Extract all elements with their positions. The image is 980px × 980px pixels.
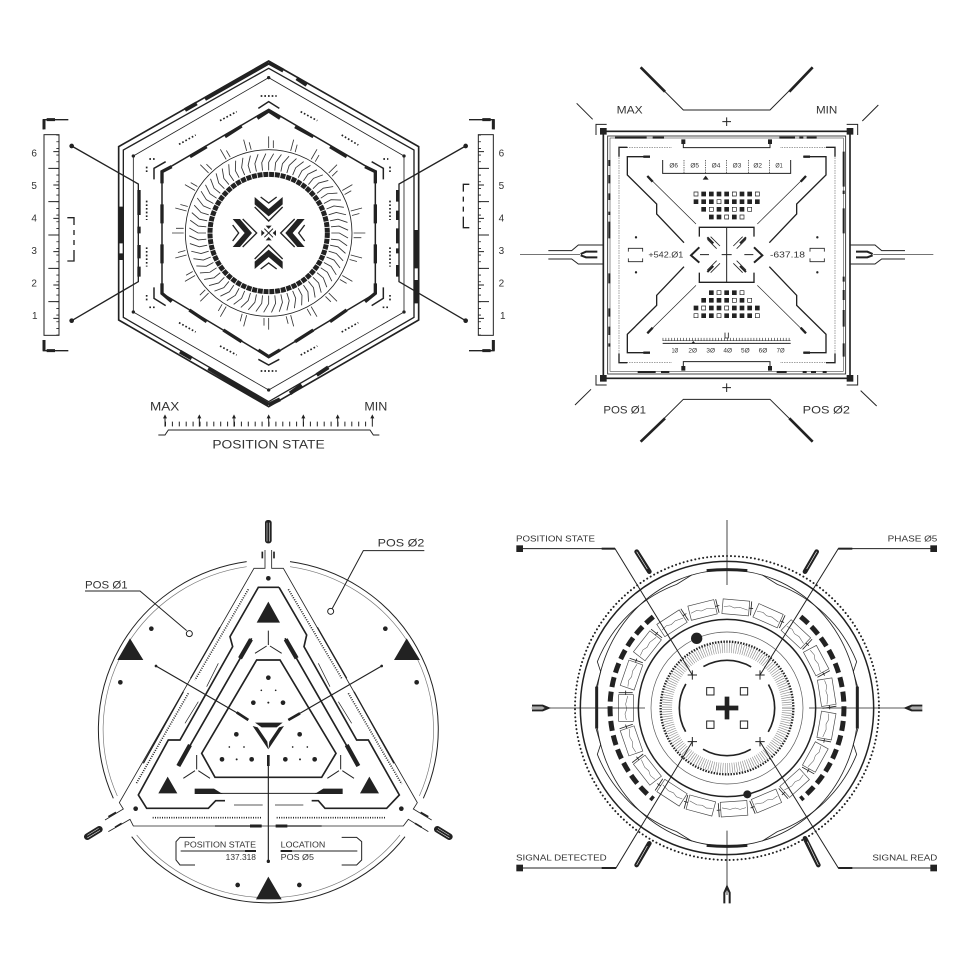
bottom scale: 7Ø (777, 348, 785, 354)
middle contour (138, 587, 399, 808)
diagonal circuit lines (627, 157, 826, 353)
ruler labels left: 4 (31, 214, 37, 225)
corner labels: POS Ø1 (603, 404, 646, 416)
panel: square scope (520, 67, 933, 442)
centre reticle (691, 227, 762, 282)
info box: POS Ø5 (281, 853, 315, 862)
callout: POS 01 (85, 579, 192, 637)
bottom scale: 1Ø (672, 348, 679, 354)
ruler labels left: 3 (31, 246, 37, 257)
bottom scale: 4Ø (723, 348, 732, 354)
small range brackets (67, 184, 469, 261)
ruler labels right: 6 (499, 149, 505, 160)
bottom scale: 6Ø (759, 348, 768, 354)
ruler labels left: 2 (31, 279, 37, 290)
callout: SIGNAL READ (760, 742, 938, 871)
bottom scale: 5Ø (741, 348, 750, 354)
panel: circular scope (516, 520, 938, 903)
square frame (596, 124, 858, 385)
right ruler and bracket (399, 120, 494, 351)
ruler labels right: 5 (499, 181, 505, 192)
centre Y emblem and radial lines (155, 665, 383, 863)
panel: triangle scope (85, 520, 449, 903)
callout: POS 01: POS Ø1 (85, 579, 128, 591)
readout brackets and dots (628, 236, 824, 273)
stem heads (87, 520, 449, 838)
inner dotted frame (619, 139, 835, 371)
callout: POS 02 (328, 538, 424, 614)
number table: Ø3 (733, 163, 742, 169)
corner labels: MIN (816, 104, 837, 116)
diagonal stem heads (637, 552, 818, 865)
corner labels: MAX (617, 104, 643, 116)
icon: centre chevrons (233, 197, 305, 269)
number table: Ø6 (669, 163, 679, 169)
panel: hexagon scope (31, 61, 506, 452)
number table (663, 160, 791, 180)
dotted side rails (136, 589, 402, 784)
bottom scale: 2Ø (688, 348, 697, 354)
corner labels: POS Ø2 (803, 404, 850, 416)
number table: Ø2 (753, 163, 763, 169)
callout: PHASE 05 (760, 534, 938, 675)
outer hexagon frame (119, 61, 419, 407)
inner triangle (202, 660, 336, 777)
inner rings and ticks (638, 619, 816, 797)
dot clusters (118, 626, 419, 887)
radial dial (172, 136, 365, 330)
ruler labels right: 1 (500, 311, 506, 322)
dotted accents (147, 96, 390, 371)
ring position dots (691, 633, 751, 798)
ruler labels right: 4 (499, 214, 505, 225)
ruler labels left: 1 (32, 311, 38, 322)
callout: PHASE 05: PHASE Ø5 (888, 534, 938, 543)
position state scale: POSITION STATE (212, 438, 325, 452)
module ring (619, 599, 837, 817)
readout values: +542.Ø1 (648, 250, 684, 260)
number table: Ø4 (712, 163, 721, 169)
crosshair axes (532, 520, 922, 903)
bottom scale: 3Ø (706, 348, 715, 354)
circle arcs (98, 562, 438, 903)
readout values (648, 250, 805, 260)
ruler labels left (31, 149, 38, 322)
right connector (850, 245, 933, 264)
ruler labels left: 5 (31, 181, 37, 192)
block grid bottom (694, 290, 760, 318)
triangle markers (117, 602, 420, 899)
dashed side arcs (610, 617, 844, 799)
tri-star marks (183, 631, 354, 778)
left connector (520, 245, 603, 264)
vertical link segments (139, 190, 398, 277)
position state scale: MIN (364, 400, 387, 414)
info box: 137.318 (226, 853, 257, 862)
inner hexagon with thick segments (154, 102, 383, 365)
info box (176, 837, 362, 865)
reticle centre (688, 670, 765, 746)
block grid top (694, 192, 760, 219)
callout: SIGNAL READ: SIGNAL READ (872, 853, 938, 862)
outer rings (575, 556, 879, 860)
outer triangle with stems (105, 550, 432, 832)
ruler labels right: 3 (499, 246, 505, 257)
ruler labels right: 2 (499, 279, 505, 290)
number table: Ø1 (775, 163, 783, 169)
corner labels (603, 104, 850, 416)
info box: LOCATION (281, 840, 326, 849)
bottom scale (663, 333, 791, 354)
readout values: -637.18 (770, 250, 805, 260)
info box: POSITION STATE (184, 840, 256, 849)
position state scale (150, 400, 387, 452)
ruler labels left: 6 (31, 149, 37, 160)
top and bottom brackets (575, 67, 878, 442)
horizontal bars (153, 789, 385, 826)
callout: POSITION STATE (516, 534, 692, 675)
callout: POS 02: POS Ø2 (378, 538, 424, 550)
number table: Ø5 (690, 163, 700, 169)
hexagon vertex dots (132, 76, 406, 392)
position state scale: MAX (150, 400, 179, 414)
left ruler and bracket (43, 120, 138, 351)
callout: SIGNAL DETECTED: SIGNAL DETECTED (516, 853, 607, 862)
ruler labels right (499, 149, 506, 322)
callout: SIGNAL DETECTED (516, 742, 692, 871)
callout: POSITION STATE: POSITION STATE (516, 534, 595, 543)
